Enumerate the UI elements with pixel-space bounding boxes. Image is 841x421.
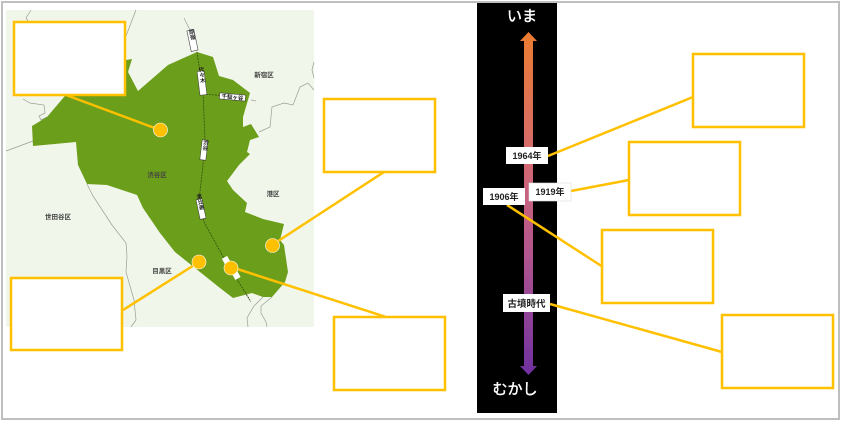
ward names: 新宿区 [254, 70, 274, 79]
map marker: southwest [192, 255, 206, 269]
station labels: 渋谷 [201, 138, 209, 152]
callout box: 1906 [602, 230, 713, 303]
railway line [197, 52, 250, 300]
callout box: Kofun period [722, 315, 833, 388]
callout box: 1964 [693, 54, 804, 127]
ward names: 渋谷区 [147, 170, 167, 179]
map marker: south [224, 261, 238, 275]
station labels: 千駄ヶ谷 [221, 92, 244, 102]
callout box: map bottom-left [11, 278, 122, 350]
label: 1919 [529, 183, 571, 201]
station labels [187, 28, 246, 280]
connector lines [66, 95, 722, 352]
arrow: time axis [520, 32, 537, 375]
label: 1964: 1964年 [512, 150, 542, 161]
Shibuya ward area [32, 52, 288, 298]
map marker: north [154, 123, 168, 137]
ward names: 港区 [266, 189, 280, 198]
callout box: map right [324, 99, 435, 172]
label: 1906: 1906年 [489, 191, 519, 202]
station labels: 恵比寿 [195, 192, 205, 212]
panel: timeline [477, 3, 557, 413]
heading: now: いま [507, 8, 537, 25]
callout box: 1919 [629, 142, 740, 215]
ward names: 世田谷区 [45, 212, 72, 221]
label: 1919: 1919年 [535, 186, 565, 197]
heading: long ago: むかし [492, 381, 538, 398]
station labels: 代々木 [197, 66, 206, 85]
callout box: map top-left [14, 22, 125, 95]
label: Kofun period: 古墳時代 [507, 298, 546, 310]
ward boundaries [6, 10, 314, 327]
label: Kofun period [503, 294, 550, 312]
label: 1964 [506, 147, 548, 164]
ward names [45, 70, 280, 275]
callout box: map bottom-right [334, 317, 445, 390]
label: 1906 [483, 188, 525, 205]
map background [6, 10, 314, 327]
panel: map [6, 10, 314, 327]
map marker: east [266, 238, 280, 252]
ward names: 目黒区 [152, 267, 172, 275]
timeline background [477, 3, 557, 413]
station labels: 原宿 [187, 28, 196, 42]
